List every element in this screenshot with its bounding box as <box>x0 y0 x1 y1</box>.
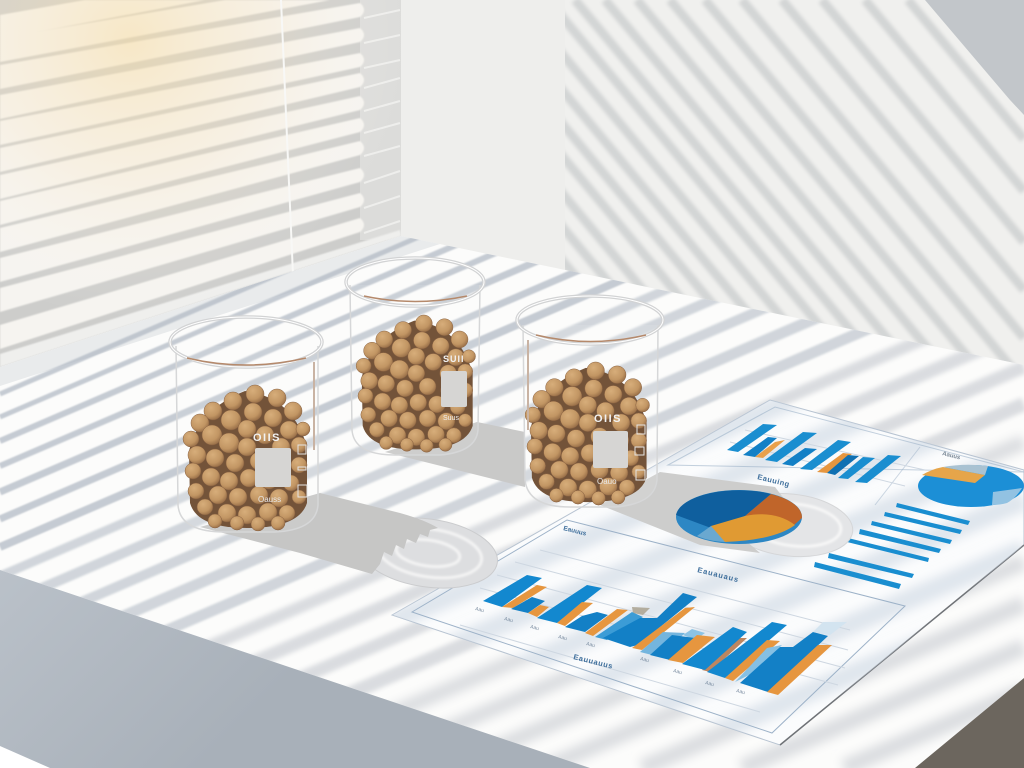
axis labels: Aau <box>530 624 540 632</box>
shadow of middle beaker <box>385 422 525 487</box>
axis labels: Aau <box>475 606 485 614</box>
lower bar chart <box>483 575 847 695</box>
table light stripes <box>0 238 1024 768</box>
beaker middle: SUII <box>443 354 465 364</box>
axis labels: Aau <box>705 680 715 688</box>
blind cord <box>281 0 293 275</box>
upper bar chart <box>727 424 901 483</box>
paper shading bands <box>394 400 1024 733</box>
window sill band <box>0 236 440 386</box>
axis labels: Aau <box>673 668 683 676</box>
window blinds <box>0 0 401 367</box>
beaker middle <box>346 258 484 455</box>
chart captions: Eauauaus <box>697 565 740 584</box>
wall top-right shade <box>925 0 1024 115</box>
table foreground shadow <box>0 570 590 768</box>
background wall <box>398 0 1024 380</box>
chart frames <box>412 407 1024 733</box>
beaker left: Oauss <box>258 495 281 504</box>
chart captions: Eauuus <box>563 525 587 538</box>
horizontal bar chart <box>814 503 970 589</box>
axis labels <box>475 606 746 696</box>
slats <box>0 0 401 367</box>
beaker right: Oauo <box>597 477 617 486</box>
label <box>441 371 467 407</box>
beaker right <box>517 296 663 507</box>
beaker left <box>170 317 322 532</box>
chart captions <box>563 451 961 671</box>
document sheet <box>391 400 1024 746</box>
axis labels: Aau <box>586 641 596 649</box>
table corner dark floor <box>915 678 1024 768</box>
axis labels: Aau <box>504 616 514 624</box>
table surface <box>0 236 1024 768</box>
shadow of right beaker <box>600 472 856 562</box>
large pie chart <box>676 490 802 544</box>
axis labels: Aau <box>736 688 746 696</box>
small pie chart <box>918 465 1024 507</box>
chart captions: Eauuing <box>757 472 791 489</box>
beaker left: OIIS <box>253 432 281 444</box>
chart captions: Eauuauus <box>573 652 614 671</box>
chart captions: Aauus <box>942 451 961 462</box>
label <box>593 431 628 468</box>
label <box>255 448 291 487</box>
axis labels: Aau <box>640 656 650 664</box>
axis labels: Aau <box>558 634 568 642</box>
shadow of left beaker <box>200 493 502 596</box>
beaker right: OIIS <box>594 413 622 425</box>
wall light stripes <box>565 0 1024 363</box>
beaker middle: Suus <box>443 415 459 422</box>
